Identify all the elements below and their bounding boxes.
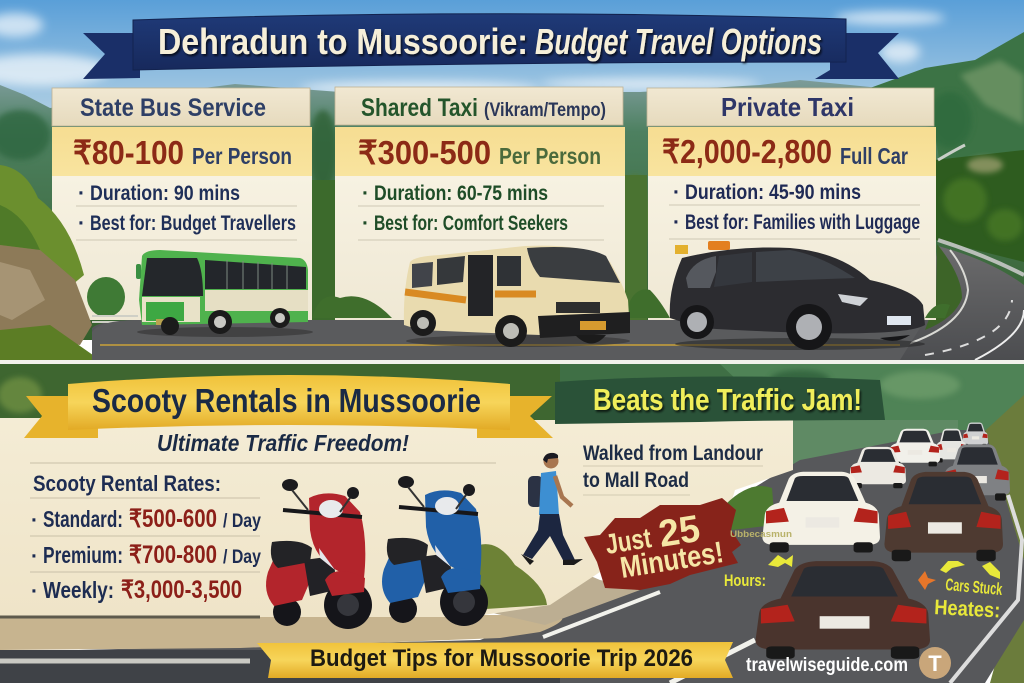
scooty gold banner (24, 375, 553, 438)
heading: State Bus Service (80, 94, 266, 122)
heading note: (Vikram/Tempo) (484, 100, 606, 121)
shoes (521, 554, 583, 565)
icon: green bus (136, 250, 313, 337)
card body (648, 175, 936, 320)
panel: shared taxi: Best for: Comfort Seekers (374, 212, 568, 235)
card head (647, 88, 934, 126)
small white car (849, 447, 906, 488)
distant cars (963, 423, 988, 447)
road strip in front of cards (92, 320, 925, 360)
premium rate: Premium: (43, 542, 123, 568)
grey car (943, 444, 1010, 501)
icon: red scooter (266, 479, 372, 629)
card head (335, 87, 623, 125)
hill texture (0, 370, 960, 413)
title text: Dehradun to Mussoorie: (158, 21, 528, 62)
bushes along road (312, 289, 950, 318)
price: ₹80-100 (73, 134, 184, 171)
sidewalk (0, 615, 562, 650)
panel: private taxi: Best for: Families with Luggage (685, 211, 920, 234)
heading: Shared Taxi (361, 94, 478, 122)
walked text: to Mall Road (583, 469, 689, 492)
left rock (0, 245, 92, 345)
legs (523, 514, 575, 562)
weekly rate (31, 576, 242, 604)
heading: Scooty Rentals in Mussoorie (92, 382, 481, 419)
small tree behind rock (87, 277, 125, 317)
zigzag icons (768, 555, 793, 567)
forest right (935, 150, 1024, 262)
traffic labels (724, 529, 1003, 622)
icon: private taxi black car (670, 241, 925, 350)
road markings (245, 356, 420, 360)
callout text: Just (603, 522, 653, 560)
brown front car (756, 561, 930, 659)
forest right highlights (943, 157, 1023, 241)
mountain right (870, 32, 1024, 190)
road centre line (100, 344, 900, 346)
walked text: Walked from Landour (583, 442, 763, 465)
standard rate: Standard: (43, 506, 123, 532)
best for: · (362, 212, 369, 235)
ribbon main (68, 375, 510, 430)
price unit: Full Car (840, 143, 908, 169)
website: travelwiseguide.com (746, 655, 908, 676)
premium rate: / Day (223, 547, 261, 568)
weekly rate: · (31, 580, 38, 603)
card head (52, 88, 310, 126)
hours label: Hours: (724, 571, 766, 590)
standard rate: ₹500-600 (129, 505, 217, 533)
ribbon main (133, 14, 846, 70)
icon: logo: T (928, 651, 942, 676)
panel: state bus service: Best for: Budget Travellers (90, 212, 296, 235)
beats traffic jam ribbon: Beats the Traffic Jam! (593, 382, 862, 417)
best for: · (78, 212, 85, 235)
icon: orange star burst (918, 571, 936, 590)
scooty rental rates (30, 463, 496, 604)
white sedan (762, 472, 880, 553)
heading: Private Taxi (721, 92, 854, 122)
premium rate: ₹700-800 (129, 541, 217, 569)
white suv (889, 429, 940, 466)
icon: shared taxi van (404, 246, 630, 347)
panel: state bus service (52, 88, 312, 320)
tree shadow (0, 205, 40, 250)
guard rail left (92, 316, 138, 322)
valley houses (793, 420, 958, 470)
callout: just 25 minutes: 25 (656, 508, 703, 556)
right tail (477, 396, 553, 438)
traffic jam cars (756, 423, 1010, 659)
weekly rate: ₹3,000-3,500 (121, 576, 242, 604)
road left dark (0, 650, 560, 683)
budget tips banner (257, 642, 733, 678)
small labels: Ubbecasmun (730, 529, 792, 539)
price unit: Per Person (192, 143, 292, 169)
panel: shared taxi: Duration: 60-75 mins (374, 182, 548, 205)
standard rate: / Day (223, 511, 261, 532)
standard rate (31, 505, 261, 533)
price unit: Per Person (499, 143, 601, 169)
forest middle gaps (311, 180, 335, 320)
price band (335, 127, 625, 176)
road (92, 246, 1024, 360)
brown car (884, 472, 1003, 561)
panel: bottom scene (0, 364, 1024, 683)
road (0, 430, 1024, 683)
panel: private taxi: Duration: 45-90 mins (685, 181, 861, 204)
left tail (24, 396, 98, 438)
price band (648, 127, 936, 176)
sky (0, 0, 1024, 180)
grass inside the curve (925, 244, 962, 330)
best for: · (673, 211, 680, 234)
walked text (583, 442, 763, 495)
duration: · (362, 182, 369, 205)
hills background (0, 364, 1024, 444)
callout: just 25 minutes: Minutes! (618, 536, 726, 585)
clouds (0, 11, 945, 95)
budget tips banner: Budget Tips for Mussoorie Trip 2026 (310, 645, 693, 672)
road lines (0, 658, 250, 664)
duration: · (673, 181, 680, 204)
distant road (938, 145, 965, 160)
price: ₹300-500 (358, 134, 491, 171)
bushes bottom-left (0, 325, 100, 360)
tree over bus card (0, 165, 84, 295)
subheading: Ultimate Traffic Freedom! (157, 430, 409, 456)
rates heading: Scooty Rental Rates: (33, 471, 221, 496)
bottom divider (0, 360, 1024, 364)
shirt (539, 471, 559, 515)
title text italic: Budget Travel Options (535, 21, 822, 62)
mountain light slopes (0, 60, 1024, 255)
duration: · (78, 182, 85, 205)
panel: private taxi (647, 88, 936, 320)
premium rate: · (31, 545, 38, 568)
callout: just 25 minutes (584, 498, 741, 590)
paint splash (584, 498, 741, 590)
panel: shared taxi (335, 87, 625, 320)
price: ₹2,000-2,800 (662, 133, 832, 170)
backpack (528, 476, 543, 507)
head (544, 454, 558, 468)
card body (335, 175, 625, 320)
mountains left and middle (0, 80, 1024, 340)
card body (52, 175, 312, 320)
icon: blue scooter (382, 476, 488, 626)
right hillside (975, 395, 1024, 683)
bush middle (725, 486, 775, 530)
icon: logo (919, 647, 951, 679)
bush behind scooters (470, 544, 547, 610)
price band (52, 127, 312, 176)
beats traffic jam ribbon (555, 376, 885, 424)
premium rate (31, 541, 261, 569)
guard rail right (938, 240, 1024, 275)
panel: state bus service: Duration: 90 mins (90, 182, 240, 205)
standard rate: · (31, 509, 38, 532)
icon: walking traveller (521, 453, 583, 565)
weekly rate: Weekly: (43, 577, 114, 603)
left rock highlight (0, 262, 45, 320)
heates label: Heates: (934, 596, 1001, 622)
panel: mountain road scene (0, 0, 1024, 360)
ribbon right tail (815, 33, 899, 79)
arm (555, 476, 572, 506)
ribbon left tail (83, 33, 140, 79)
title banner (83, 14, 899, 79)
foreground scenery (0, 165, 950, 360)
panel: scooty rental paper (0, 418, 793, 617)
